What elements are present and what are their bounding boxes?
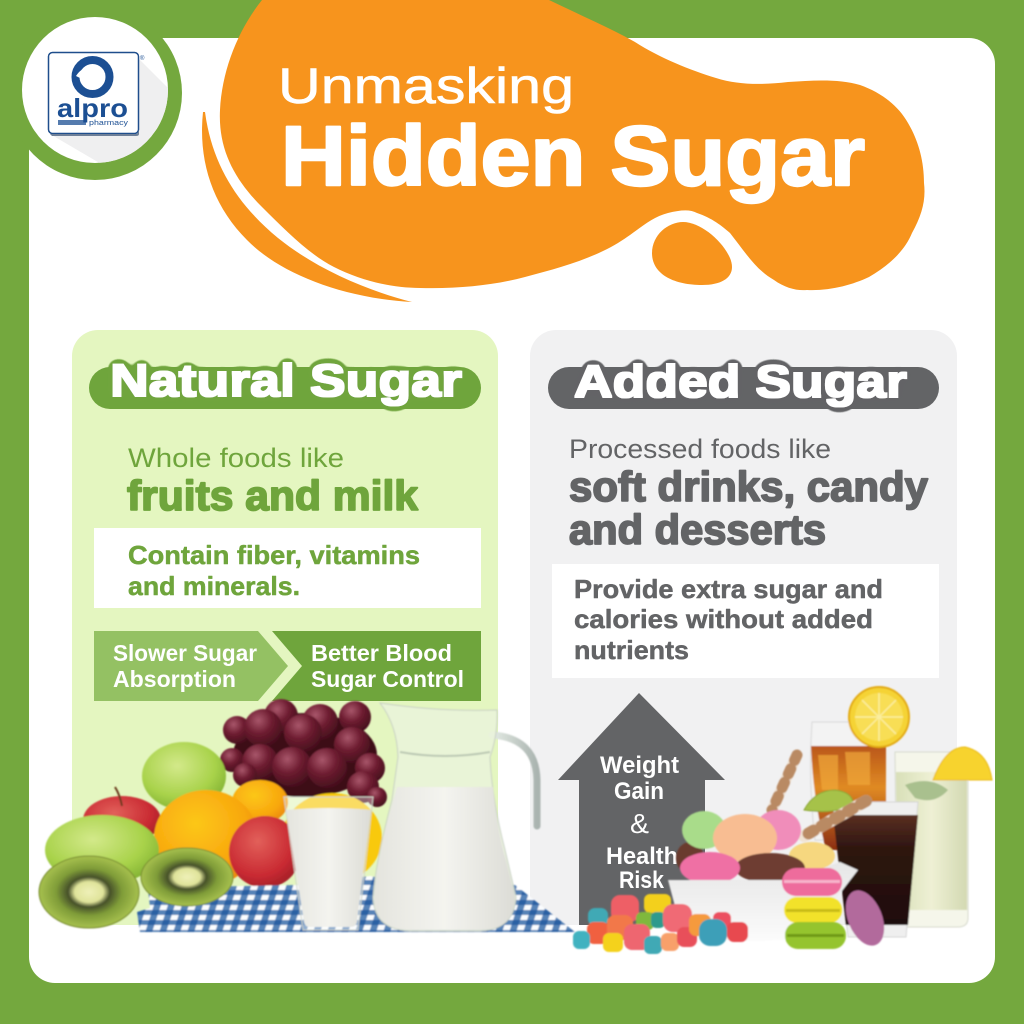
added sugar warning box: Provide extra sugar and [574, 574, 883, 604]
green apple front [45, 815, 159, 885]
arrow step: slower sugar absorption: Slower Sugar [113, 640, 257, 666]
grapes [220, 699, 387, 807]
title blob [202, 0, 924, 302]
back orange [232, 780, 288, 824]
natural sugar heading: Natural Sugar [110, 355, 462, 406]
arrow step: slower sugar absorption [94, 631, 288, 701]
added sugar intro: soft drinks, candy [569, 463, 929, 510]
checked cloth [137, 876, 575, 932]
logo badge: ® [140, 55, 145, 62]
title second line: Hidden Sugar [281, 109, 865, 203]
iced tea glass [811, 722, 886, 850]
illustration: ice cream, candy, macarons and drinks [573, 687, 992, 954]
arrow step: slower sugar absorption: Absorption [113, 666, 236, 692]
up arrow: weight gain and health risk: Risk [619, 867, 665, 894]
title first line: Unmasking [278, 58, 574, 114]
big orange [154, 790, 258, 886]
added sugar warning box: calories without added [574, 604, 873, 634]
up arrow: weight gain and health risk [558, 693, 725, 925]
logo badge [22, 17, 182, 180]
up arrow: weight gain and health risk: Gain [614, 778, 664, 805]
natural sugar benefit box: Contain fiber, vitamins [128, 540, 420, 570]
illustration: fruit, milk glass and jug on checked cloth [39, 699, 575, 932]
white bowl [668, 862, 858, 941]
glass of milk [284, 797, 373, 930]
up arrow: weight gain and health risk: Weight [600, 752, 679, 779]
lemon slice on iced tea [849, 687, 909, 747]
added sugar warning box [552, 564, 939, 678]
panel: natural sugar [72, 330, 498, 925]
arrow step: better blood sugar control [272, 631, 481, 701]
red apple back [83, 787, 161, 844]
added sugar intro: Processed foods like [569, 434, 831, 464]
natural sugar intro [127, 443, 419, 519]
jug of milk [373, 703, 537, 931]
logo badge: alpro [57, 93, 128, 123]
added sugar warning box: nutrients [574, 635, 689, 665]
added sugar intro [569, 434, 929, 553]
red apple front [229, 816, 301, 888]
natural sugar benefit box: and minerals. [128, 571, 300, 601]
panel: added sugar [530, 330, 957, 925]
arrow step: better blood sugar control: Sugar Control [311, 666, 464, 692]
cola glass [833, 802, 918, 937]
up arrow: weight gain and health risk: Health [606, 843, 678, 870]
natural sugar intro: fruits and milk [127, 472, 419, 519]
natural sugar intro: Whole foods like [128, 443, 344, 473]
logo badge: pharmacy [89, 120, 129, 127]
kiwi slice front [39, 856, 139, 928]
added sugar heading [548, 356, 939, 409]
lime slice [804, 790, 853, 811]
added sugar intro: and desserts [569, 506, 826, 553]
up arrow: weight gain and health risk: & [630, 808, 649, 839]
lemonade glass [895, 752, 968, 927]
arrow step: better blood sugar control: Better Blood [311, 640, 452, 666]
added sugar heading: Added Sugar [574, 356, 907, 407]
green apple back [142, 742, 226, 810]
kiwi slice back [141, 848, 233, 906]
lemon wedge on lemonade [933, 747, 992, 780]
lemon behind glass [282, 793, 382, 883]
title blob droplet [652, 222, 732, 285]
gummy candies [573, 894, 748, 954]
macarons [782, 868, 892, 951]
natural sugar benefit box [94, 528, 481, 608]
ice cream scoops [676, 810, 835, 884]
title blob tail [202, 112, 412, 302]
wafer straws [772, 755, 866, 836]
